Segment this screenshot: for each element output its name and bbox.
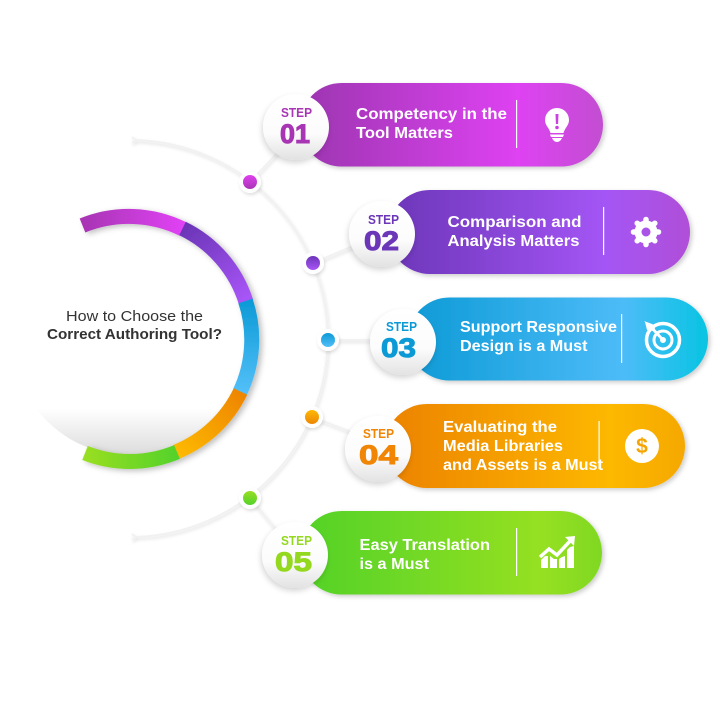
dot 1 [239,171,261,193]
badge 01: STEP [281,106,312,120]
badge 05: 05 [275,547,312,577]
text: step 02: Comparison and [448,214,582,231]
dot 2 [302,252,324,274]
badge 05: STEP [281,534,312,548]
panel: step 05 [262,511,602,594]
panel: step 03 [370,298,708,380]
text: step 05: is a Must [360,556,430,573]
dot 4 [301,406,323,428]
text: step 01 [356,106,507,142]
node dots [239,171,339,509]
icon: dollar coin [625,429,659,463]
title [47,308,222,343]
icon: dollar coin: $ [636,435,648,458]
title: Correct Authoring Tool? [47,326,222,343]
panel: step 02 [349,190,690,274]
text: step 04: Evaluating the [443,419,557,436]
central circle [13,216,252,461]
text: step 01: Tool Matters [356,125,453,142]
badge 04 [345,416,411,482]
badge 01 [263,94,329,160]
text: step 03: Design is a Must [460,338,588,355]
dot 5 [239,487,261,509]
text: step 01: Competency in the [356,106,507,123]
panel: step 01 [263,83,603,166]
icon: growth chart [540,536,575,568]
badge 03 [370,309,436,375]
badge 04: 04 [359,440,398,470]
text: step 04: Media Libraries [443,438,563,455]
badge 02: 02 [364,226,399,256]
badge 04: STEP [363,427,394,441]
text: step 04 [443,419,604,474]
badge 03: 03 [381,333,416,363]
ring: five coloured segments [82,216,252,461]
connector arc [132,137,385,540]
badge 02 [349,201,415,267]
text: step 03: Support Responsive [460,319,617,336]
badge 01: 01 [280,119,310,149]
text: step 02: Analysis Matters [448,233,580,250]
badge 02: STEP [368,213,399,227]
text: step 02 [448,214,582,250]
dot 3 [317,329,339,351]
badge 05 [262,522,328,588]
text: step 05 [360,537,490,573]
panel: step 04 [345,404,685,488]
text: step 04: and Assets is a Must [443,457,604,474]
icon: light bulb [545,108,569,142]
text: step 03 [460,319,617,355]
text: step 05: Easy Translation [360,537,490,554]
badge 03: STEP [386,320,417,334]
icon: target [644,321,680,356]
icon: gear [634,220,658,244]
title: How to Choose the [66,308,203,325]
